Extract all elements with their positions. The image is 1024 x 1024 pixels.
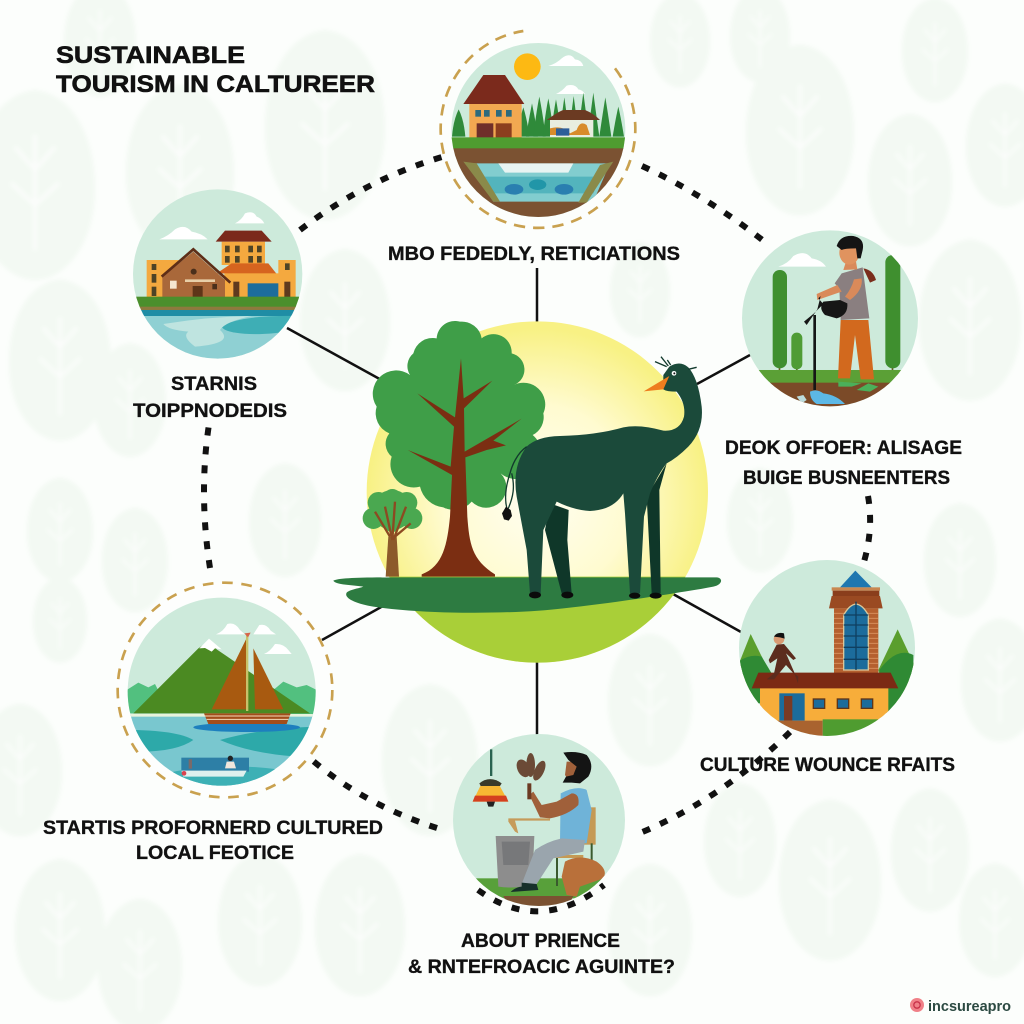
walking figure <box>767 633 798 683</box>
tree row <box>452 93 624 137</box>
grass <box>447 137 633 149</box>
house <box>463 75 524 141</box>
panel: top circle, house and water <box>441 31 635 228</box>
panel: top-left circle, lakeside buildings <box>132 189 305 363</box>
connector lines <box>287 268 750 735</box>
sun disc <box>367 321 708 663</box>
hills <box>738 629 917 717</box>
water <box>130 714 313 786</box>
label: lower right: CULTURE WOUNCE RFAITS <box>700 755 955 776</box>
panel: lower-left circle, sailboat <box>118 583 332 797</box>
dashed ring <box>441 31 635 228</box>
large tree <box>373 321 545 577</box>
mountain <box>133 640 310 713</box>
dotted connector ring <box>204 157 870 911</box>
label: upper left <box>133 374 287 422</box>
lawn <box>822 719 878 736</box>
label: bottom: & RNTEFROACIC AGUINTE? <box>408 957 675 978</box>
small tree <box>363 489 422 577</box>
gazebo <box>547 110 600 137</box>
central illustration: tree and animal on sun <box>333 321 721 663</box>
soil <box>453 148 624 217</box>
cypress trees <box>773 255 900 377</box>
label: lower left <box>43 818 383 864</box>
person <box>804 236 878 392</box>
animal <box>502 357 702 599</box>
title: TOURISM IN CALTUREER <box>56 71 375 98</box>
label: bottom <box>408 931 675 978</box>
small boat <box>181 756 249 777</box>
water <box>141 310 294 359</box>
stone block <box>496 836 534 888</box>
sailboat <box>193 633 300 732</box>
label: lower left: LOCAL FEOTICE <box>136 843 294 864</box>
label: bottom: ABOUT PRIENCE <box>461 931 620 952</box>
lamp <box>473 749 508 807</box>
building <box>752 673 898 721</box>
hooves <box>529 592 662 599</box>
label: upper right <box>725 438 962 489</box>
title: SUSTAINABLE <box>56 42 245 69</box>
label: upper right: BUIGE BUSNEENTERS <box>743 468 950 489</box>
label: upper right: DEOK OFFOER: ALISAGE <box>725 438 962 459</box>
body <box>515 363 702 593</box>
eye <box>672 371 676 376</box>
ground <box>333 577 721 613</box>
clouds <box>159 212 264 239</box>
clouds <box>548 55 585 94</box>
far legs <box>545 463 667 593</box>
woven pile <box>562 857 605 897</box>
label: lower left: STARTIS PROFORNERD CULTURED <box>43 818 383 839</box>
back hills <box>127 682 317 714</box>
tower <box>829 571 883 673</box>
ground <box>758 370 901 385</box>
grass <box>476 878 602 898</box>
chair <box>555 807 596 886</box>
artisan <box>508 752 592 892</box>
water splash <box>810 390 845 404</box>
title <box>56 42 375 98</box>
sun <box>514 53 541 80</box>
pool <box>468 163 610 202</box>
label: upper left: TOIPPNODEDIS <box>133 401 287 422</box>
label: upper left: STARNIS <box>171 374 257 395</box>
panel: lower-right circle, tower building <box>738 560 917 739</box>
panel: top-right circle, person planting <box>740 230 920 409</box>
beak <box>644 376 669 391</box>
panel: bottom circle, artisan <box>450 734 630 910</box>
clouds <box>216 623 292 654</box>
label: top: MBO FEDEDLY, RETICIATIONS <box>388 244 680 265</box>
crest and tail <box>506 357 697 510</box>
buildings <box>147 231 296 297</box>
dashed ring <box>118 583 332 797</box>
grass <box>132 297 305 307</box>
cloud <box>778 253 826 267</box>
logo: incsureapro <box>928 998 1011 1015</box>
